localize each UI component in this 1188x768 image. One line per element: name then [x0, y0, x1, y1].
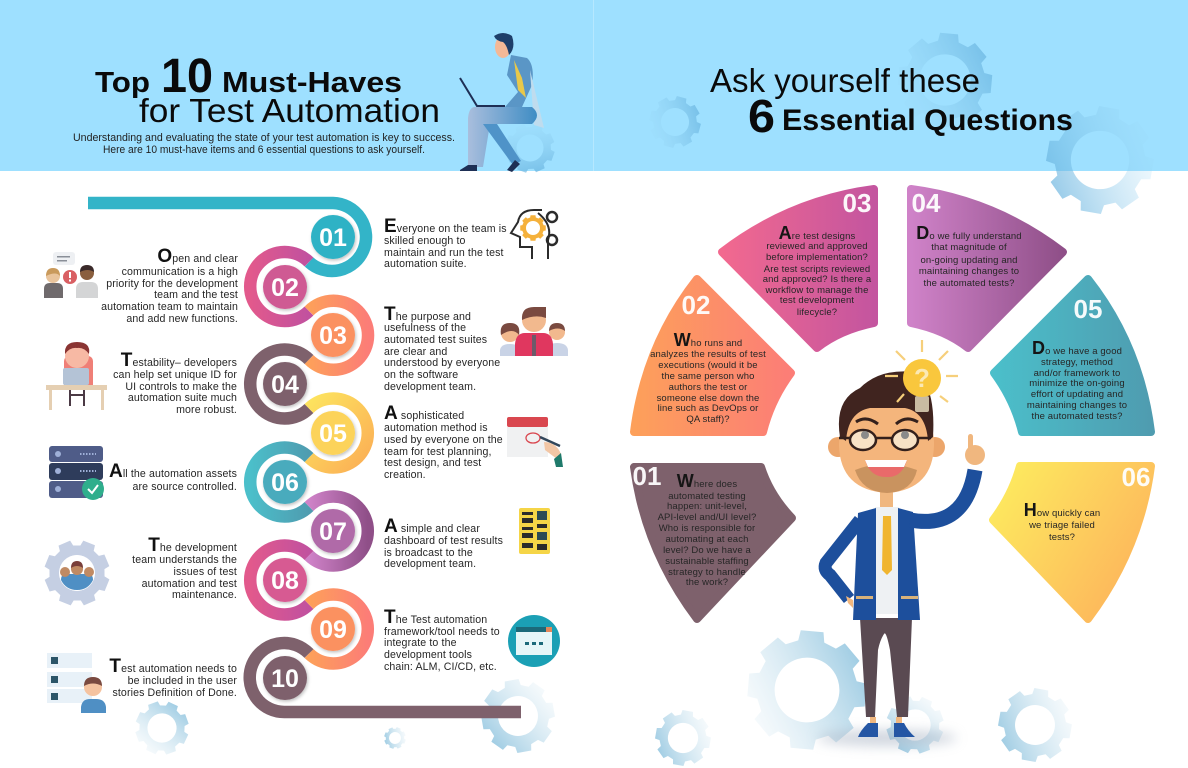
text: purpose and usefulness: usefulness of the	[384, 322, 466, 334]
panel: question 02: QA staff)?	[686, 414, 730, 425]
number discs 01 to 10	[263, 215, 355, 700]
panel: question 05: strategy, method	[1041, 357, 1113, 368]
panel: question 06: 06	[1122, 462, 1150, 492]
panel: question 03: 03	[843, 188, 871, 218]
panel: question 02: the same person who	[661, 371, 755, 382]
panel: question 03: Are test scripts reviewed	[764, 264, 870, 275]
text: open and clear communication: communication is a high	[122, 266, 238, 278]
panel: question 05: 05	[1074, 294, 1102, 324]
panel: question 01: Who is responsible for	[659, 523, 755, 534]
panel: question 02: line such as DevOps or	[658, 403, 758, 414]
icon: two people talking	[44, 252, 98, 298]
text: framework tool: framework/tool needs to	[384, 626, 500, 638]
panel: question 05: maintaining changes to	[1027, 400, 1127, 411]
panel: question 01	[633, 461, 792, 619]
panel: question 01: level? Do we have a	[663, 545, 752, 556]
panel: question 06: we triage failed	[1028, 520, 1095, 531]
panel: question 03: before implementation?	[766, 252, 868, 263]
text: everyone skilled: maintain and run the test	[384, 247, 504, 259]
panel: question 05: the automated tests?	[1031, 411, 1123, 422]
panel: question 04: the automated tests?	[923, 278, 1015, 289]
text: source controlled: All the automation assets	[109, 461, 237, 482]
text: testability: more robust.	[176, 404, 237, 416]
text: sophisticated method: used by everyone on the	[384, 434, 503, 446]
panel: question 01: Where does	[677, 471, 737, 491]
icon: three team members	[500, 307, 568, 356]
text: open and clear communication: automation team to maintain	[101, 301, 238, 313]
number discs 01 to 10: 05	[319, 420, 347, 448]
text: development team understands: maintenance.	[172, 589, 237, 601]
panel: question 01: API-level and/UI level?	[658, 512, 756, 523]
text: definition of done: stories Definition of Done.	[112, 687, 237, 699]
panel: question 03: workflow to manage the	[765, 285, 868, 296]
panel: question 02	[634, 279, 791, 432]
header band	[0, 0, 1188, 171]
text: framework tool: development tools	[384, 649, 472, 661]
title: top 10 must-haves	[95, 50, 440, 129]
text: dashboard: dashboard of test results	[384, 535, 503, 547]
icon: application window	[508, 615, 560, 667]
text: definition of done: be included in the user	[128, 675, 237, 687]
text: purpose and usefulness: The purpose and	[384, 304, 471, 325]
text: development team understands: issues of test	[173, 566, 237, 578]
text: sophisticated method: A sophisticated	[384, 403, 464, 424]
text: sophisticated method: automation method is	[384, 422, 488, 434]
number discs 01 to 10: 01	[319, 224, 347, 252]
text: development team understands	[132, 535, 237, 601]
number discs 01 to 10: 02	[271, 274, 299, 302]
panel: question 05: Do we have a good	[1032, 338, 1122, 358]
panel: question 01: the work?	[686, 577, 728, 588]
title: top 10 must-haves: Top	[95, 67, 150, 99]
winding ribbon 01 to 10	[88, 203, 521, 712]
illustration: thinking man with lightbulb: ?	[914, 363, 930, 393]
text: definition of done: Test automation needs to	[109, 656, 237, 677]
panel: question 02: executions (would it be	[658, 360, 758, 371]
intro text: Understanding and evaluating the state of your test automation is key to success.	[73, 132, 455, 144]
text: source controlled: are source controlled.	[132, 481, 237, 493]
panel: question 02: someone else down the	[657, 393, 759, 404]
text: open and clear communication: priority for the development	[106, 278, 238, 290]
intro text	[73, 132, 455, 156]
text: sophisticated method: team for test planning,	[384, 446, 492, 458]
panel: question 01: happen: unit-level,	[667, 501, 747, 512]
number discs 01 to 10: 10	[271, 665, 299, 693]
text: development team understands: automation and test	[142, 578, 237, 590]
text: testability: Testability– developers	[121, 350, 237, 371]
title: ask yourself: Essential Questions	[782, 104, 1073, 137]
number discs 01 to 10: 08	[271, 567, 299, 595]
text: sophisticated method	[384, 403, 503, 481]
text: testability: automation suite much	[128, 392, 237, 404]
panel: question 03: Are test designs	[779, 223, 855, 243]
text: testability: can help set unique ID for	[113, 369, 237, 381]
icon: calendar with pen	[507, 417, 563, 467]
text: open and clear communication: team and the test	[154, 289, 238, 301]
number discs 01 to 10: 09	[319, 616, 347, 644]
icon: checklist and person	[47, 653, 106, 713]
panel: question 01: strategy to handle	[668, 567, 746, 578]
text: purpose and usefulness: on the software	[384, 369, 458, 381]
number discs 01 to 10: 06	[271, 469, 299, 497]
text: sophisticated method: creation.	[384, 469, 426, 481]
icon: team in gear	[35, 531, 119, 615]
icon: server stack with check	[49, 446, 104, 500]
panel: question 01: 01	[633, 461, 661, 491]
panel: question 04: 04	[912, 188, 941, 218]
icon: head with gears	[511, 210, 557, 259]
text: testability: UI controls to make the	[125, 381, 237, 393]
panel: question 05: effort of updating and	[1031, 389, 1123, 400]
panel: question 04: that magnitude of	[931, 242, 1007, 253]
intro text: Here are 10 must-have items and 6 essential questions to ask yourself.	[103, 144, 425, 156]
panel: question 02: 02	[682, 290, 710, 320]
panel: question 06: How quickly can	[1024, 500, 1100, 520]
panel: question 03	[722, 188, 874, 348]
title: ask yourself	[710, 62, 1073, 142]
panel: question 05: minimize the on-going	[1029, 378, 1125, 389]
panel: question 06	[993, 462, 1151, 619]
text: everyone skilled: skilled enough to	[384, 235, 466, 247]
panel: question 01: automating at each	[666, 534, 748, 545]
title: ask yourself: 6	[748, 90, 775, 142]
number discs 01 to 10: 03	[319, 322, 347, 350]
panel: question 02: analyzes the results of test	[650, 349, 766, 360]
panel: question 06: tests?	[1049, 532, 1075, 543]
text: purpose and usefulness: automated test suites	[384, 334, 487, 346]
number discs 01 to 10: 04	[271, 371, 299, 399]
text: definition of done	[109, 656, 237, 699]
text: purpose and usefulness: development team.	[384, 381, 476, 393]
text: dashboard	[384, 516, 503, 570]
title: top 10 must-haves: Must-Haves	[222, 67, 402, 99]
panel: question 03: and approved? Is there a	[763, 274, 872, 285]
text: source controlled	[109, 461, 237, 493]
text: framework tool: The Test automation	[384, 607, 487, 628]
text: open and clear communication: Open and clear	[157, 246, 238, 267]
panel: question 02: Who runs and	[674, 330, 742, 350]
illustration: thinking man with lightbulb	[817, 340, 985, 746]
text: framework tool	[384, 607, 500, 673]
panel: question 04: maintaining changes to	[919, 266, 1019, 277]
text: sophisticated method: test design, and test	[384, 457, 481, 469]
title: top 10 must-haves: 10	[161, 50, 213, 103]
text: open and clear communication	[101, 246, 238, 325]
number discs 01 to 10: 07	[319, 518, 347, 546]
text: development team understands: The development	[148, 535, 237, 556]
title: top 10 must-haves: for Test Automation	[139, 92, 440, 129]
panel: question 05	[994, 279, 1151, 432]
panel: question 02: authors the test or	[669, 382, 747, 393]
text: testability	[113, 350, 237, 416]
text: dashboard: A simple and clear	[384, 516, 480, 537]
text: purpose and usefulness: understood by everyone	[384, 357, 500, 369]
panel: question 03: lifecycle?	[797, 307, 837, 318]
panel: question 03: test development	[780, 295, 854, 306]
text: open and clear communication: and add new functions.	[126, 313, 238, 325]
panel: question 04	[911, 188, 1063, 348]
icon: developer at desk	[46, 342, 107, 410]
title: ask yourself: Ask yourself these	[710, 62, 980, 99]
panel: question 04: Do we fully understand	[916, 223, 1022, 243]
icon: man sitting with laptop	[460, 33, 544, 172]
panel: question 04: on-going updating and	[920, 255, 1018, 266]
text: everyone skilled: automation suite.	[384, 258, 467, 270]
text: purpose and usefulness	[384, 304, 500, 393]
panel: question 01: automated testing	[668, 491, 746, 502]
panel: question 05: and/or framework to	[1034, 368, 1120, 379]
text: purpose and usefulness: are clear and	[384, 346, 447, 358]
text: everyone skilled	[384, 216, 507, 270]
text: development team understands: team understands the	[132, 554, 237, 566]
text: dashboard: is broadcast to the	[384, 547, 473, 559]
text: dashboard: development team.	[384, 558, 476, 570]
panel: question 03: reviewed and approved	[766, 241, 868, 252]
text: everyone skilled: Everyone on the team is	[384, 216, 507, 237]
text: framework tool: integrate to the	[384, 637, 457, 649]
icon: dashboard panel	[519, 508, 550, 554]
panel: question 01: sustainable staffing	[665, 556, 749, 567]
text: framework tool: chain: ALM, CI/CD, etc.	[384, 661, 497, 673]
